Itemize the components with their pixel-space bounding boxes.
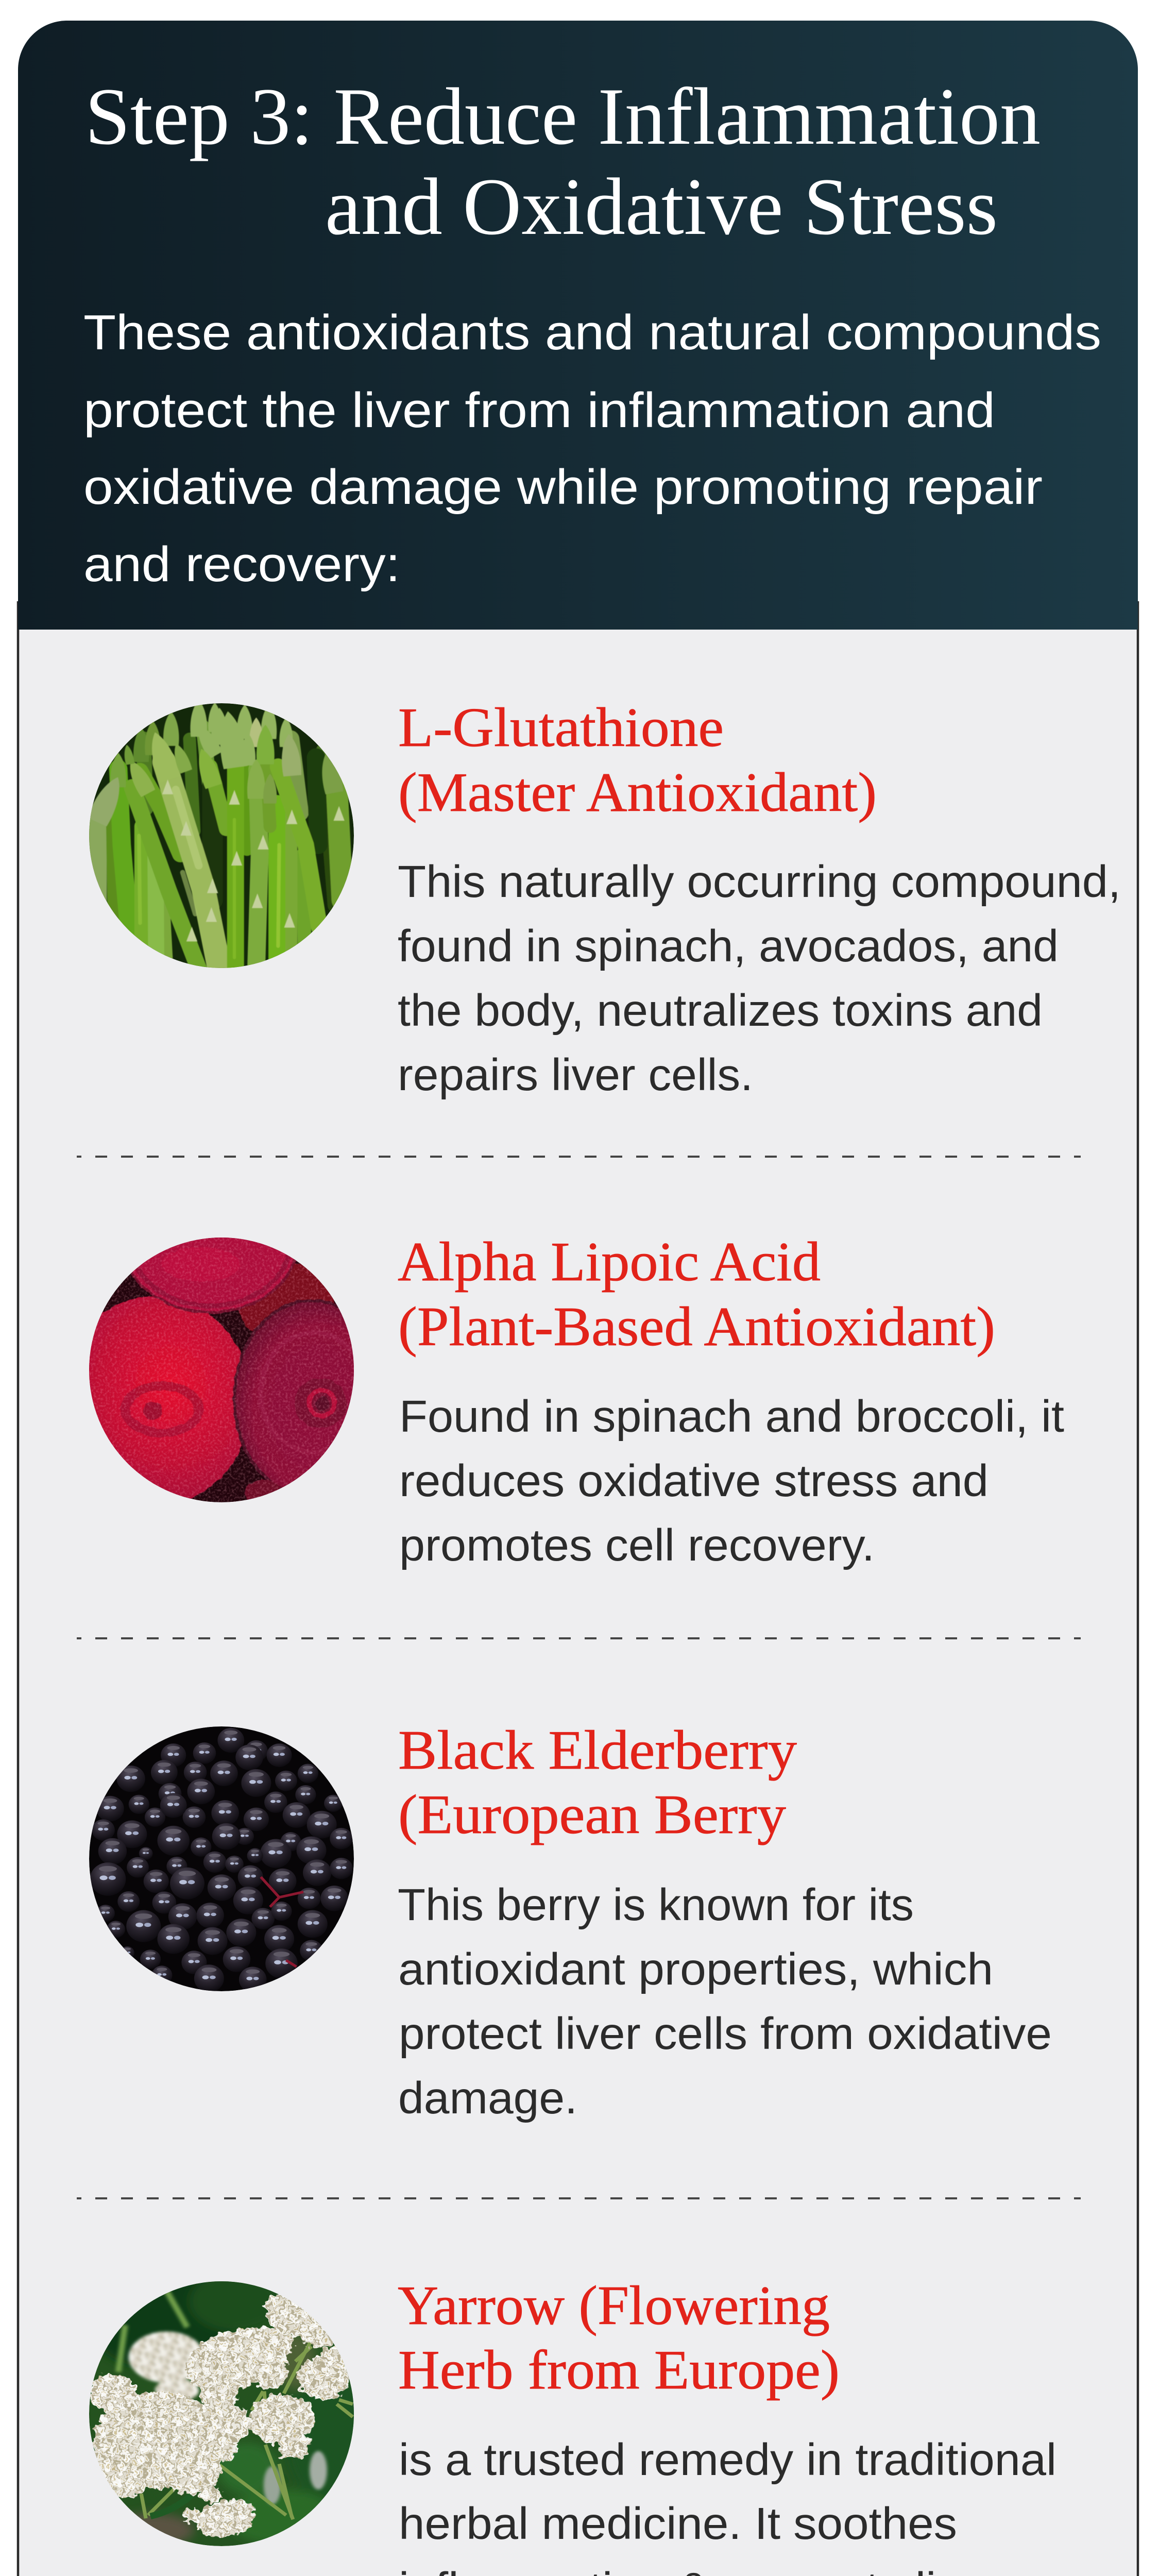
heading: L-Glutathione: L-Glutathione: [398, 697, 724, 758]
text: Alpha Lipoic Acid description: promotes cell recovery.: [399, 1520, 875, 1570]
heading: Black Elderberry: [398, 1720, 797, 1845]
text: L-Glutathione description: found in spinach, avocados, and: [398, 921, 1059, 971]
icon: yarrow flowers photo: [89, 2281, 354, 2546]
text: Alpha Lipoic Acid description: Found in spinach and broccoli, it: [399, 1392, 1064, 1442]
text: L-Glutathione description: [398, 857, 1121, 1100]
heading: L-Glutathione: [398, 697, 877, 823]
intro text: and recovery:: [83, 537, 400, 592]
text: Yarrow description: [399, 2435, 1056, 2576]
text: Black Elderberry description: protect liver cells from oxidative: [399, 2009, 1052, 2059]
text: L-Glutathione description: the body, neutralizes toxins and: [398, 986, 1043, 1036]
intro text: protect the liver from inflammation and: [83, 383, 995, 438]
heading: Yarrow: Yarrow (Flowering: [398, 2275, 830, 2336]
heading: Black Elderberry: (European Berry: [398, 1784, 786, 1845]
text: Alpha Lipoic Acid description: reduces oxidative stress and: [399, 1456, 988, 1506]
text: Yarrow description: herbal medicine. It soothes: [399, 2499, 957, 2549]
text: Yarrow description: is a trusted remedy in traditional: [399, 2435, 1056, 2485]
panel: header: [18, 21, 1138, 630]
panel: card body: [18, 601, 1138, 2576]
intro text: These antioxidants and natural compounds: [83, 305, 1101, 360]
heading: Black Elderberry: Black Elderberry: [398, 1720, 797, 1781]
icon: elderberries photo: [89, 1726, 354, 1992]
intro text: [83, 305, 1101, 592]
heading: L-Glutathione: (Master Antioxidant): [398, 762, 877, 823]
heading: Yarrow: [398, 2275, 840, 2401]
text: L-Glutathione description: repairs liver cells.: [398, 1050, 753, 1100]
text: Black Elderberry description: damage.: [398, 2073, 577, 2123]
text: Alpha Lipoic Acid description: [399, 1392, 1064, 1570]
text: Black Elderberry description: antioxidant properties, which: [398, 1944, 993, 1994]
icon: beet slices photo: [89, 1238, 354, 1502]
title: Step 3: Reduce Inflammation: [85, 72, 1041, 162]
heading: Alpha Lipoic Acid: [398, 1231, 995, 1358]
text: L-Glutathione description: This naturally occurring compound,: [398, 857, 1121, 907]
text: Black Elderberry description: This berry is known for its: [398, 1880, 914, 1930]
heading: Alpha Lipoic Acid: (Plant-Based Antioxidant): [398, 1296, 995, 1358]
title: and Oxidative Stress: [325, 162, 998, 252]
intro text: oxidative damage while promoting repair: [83, 460, 1043, 515]
text: Black Elderberry description: [398, 1880, 1052, 2123]
title: [85, 72, 1041, 252]
heading: Yarrow: Herb from Europe): [398, 2340, 840, 2401]
icon: asparagus photo: [87, 700, 354, 969]
heading: Alpha Lipoic Acid: Alpha Lipoic Acid: [398, 1231, 821, 1293]
